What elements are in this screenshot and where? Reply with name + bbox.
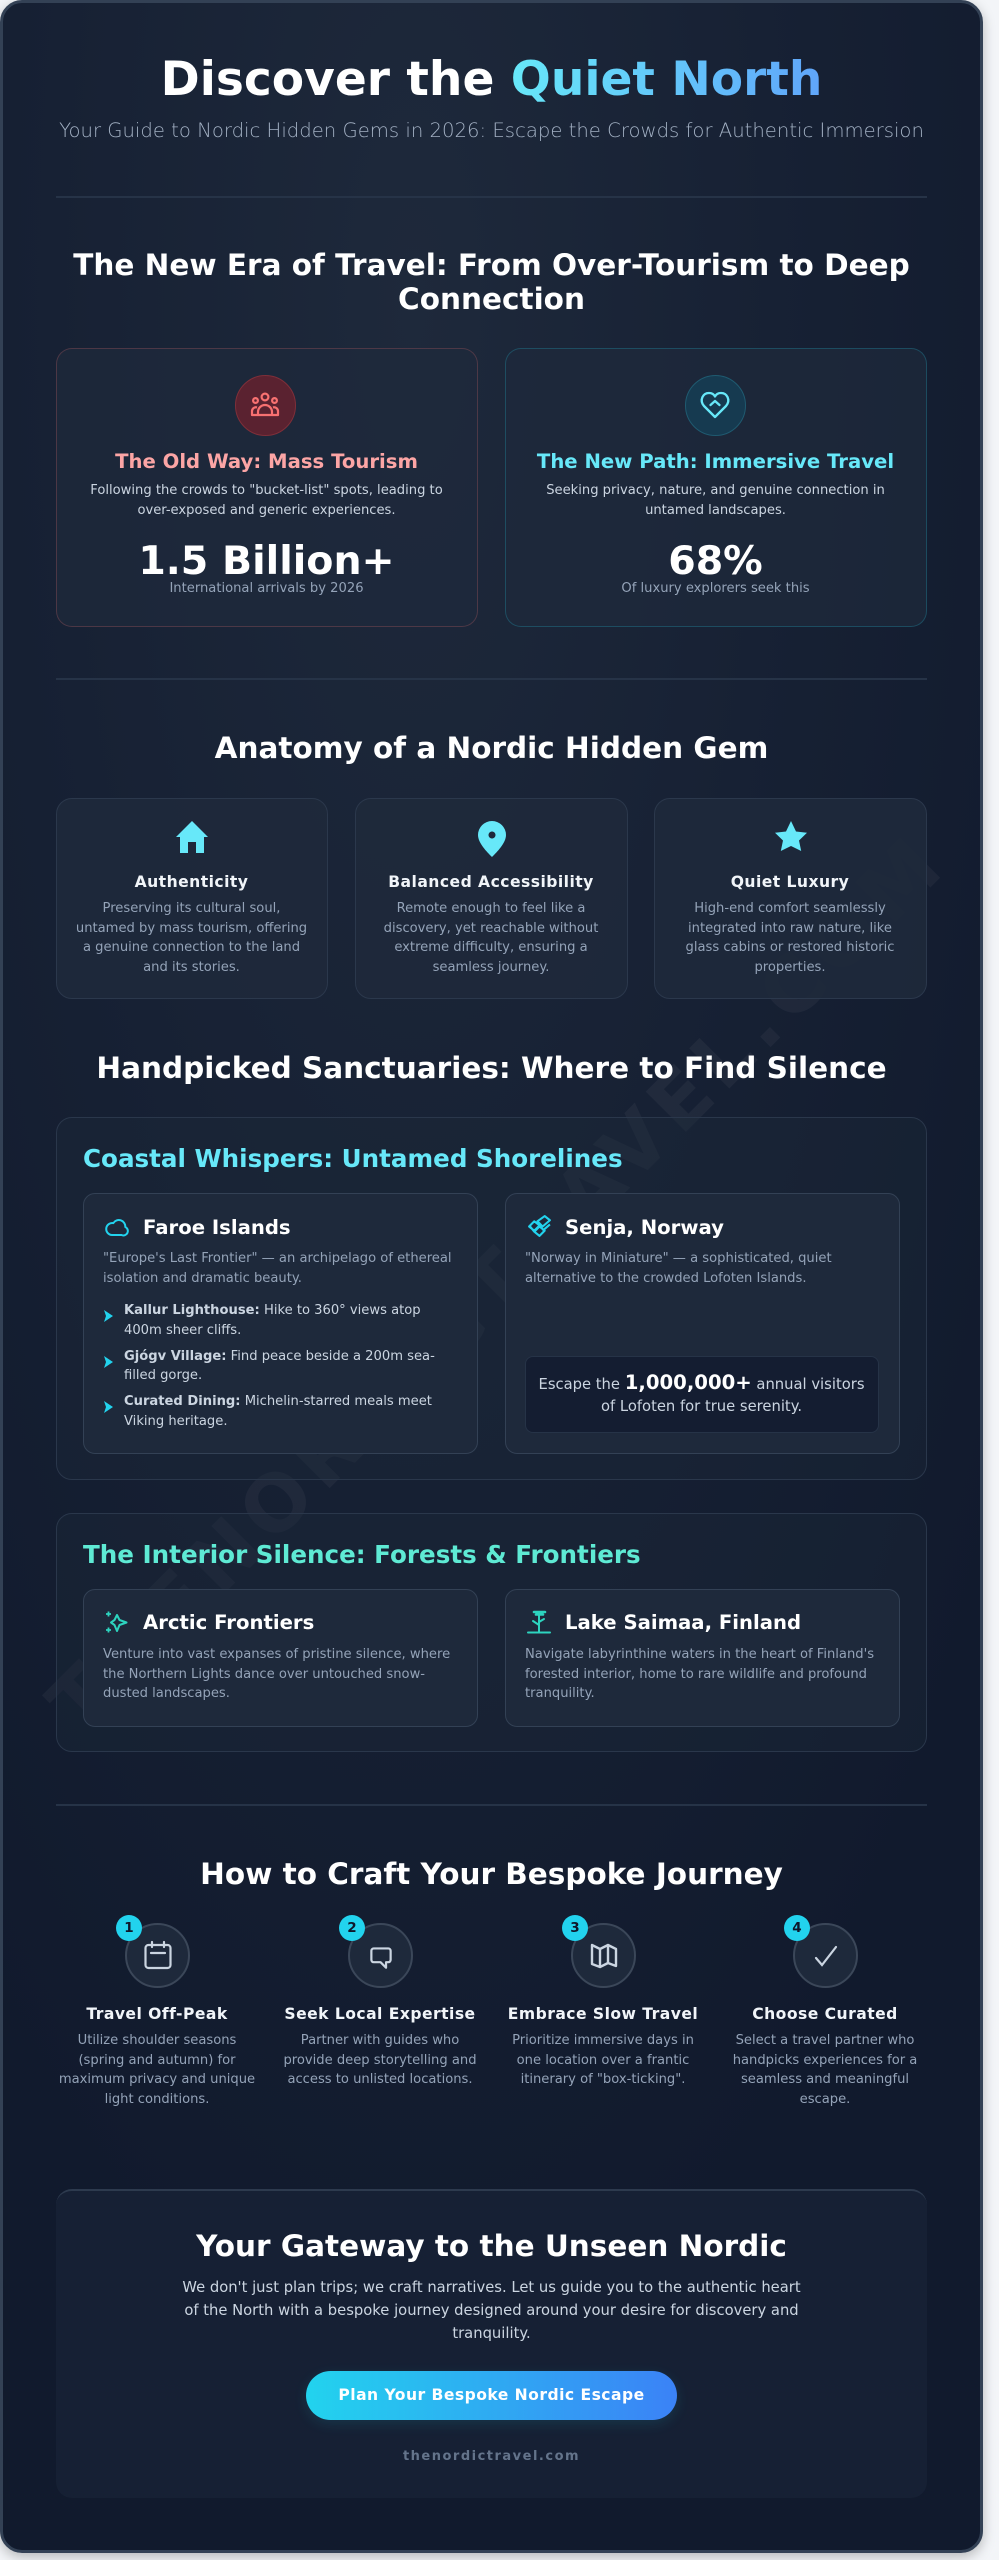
badge: 3 xyxy=(562,1915,588,1941)
stat label: International arrivals by 2026 xyxy=(169,581,364,596)
icon: heart xyxy=(685,375,746,436)
heading: balanced accessibility: Balanced Accessibility xyxy=(388,873,594,891)
text: senja description: "Norway in Miniature" — a sophisticated, quiet xyxy=(525,1251,832,1266)
text: senja description xyxy=(525,1251,832,1286)
heading: anatomy: Anatomy of a Nordic Hidden Gem xyxy=(215,731,768,765)
text: old way description: Following the crowds to "bucket-list" spots, leading to xyxy=(90,483,443,498)
text: step 2: provide deep storytelling and xyxy=(283,2053,477,2068)
badge: 4: 4 xyxy=(792,1920,802,1936)
heading: new path: The New Path: Immersive Travel xyxy=(537,450,894,473)
stat: 1.5 billion: 1.5 Billion+ xyxy=(138,538,395,584)
text: gateway: of the North with a bespoke journey designed around your desire for discovery and xyxy=(184,2302,799,2319)
heading: interior: The Interior Silence: Forests & Frontiers xyxy=(83,1540,641,1569)
badge: 3: 3 xyxy=(570,1920,580,1936)
button xyxy=(306,2371,677,2420)
text: step 3: Prioritize immersive days in xyxy=(512,2033,694,2048)
text: step 3 xyxy=(512,2033,694,2087)
text: step 4 xyxy=(733,2033,917,2107)
heading: faroe islands: Faroe Islands xyxy=(143,1216,291,1239)
text: step 2: access to unlisted locations. xyxy=(287,2072,473,2087)
icon: tree by lake xyxy=(527,1610,551,1634)
text: faroe description: "Europe's Last Frontier" — an archipelago of ethereal xyxy=(103,1251,452,1266)
panel: the old way xyxy=(56,348,478,627)
heading: new era of travel xyxy=(73,248,910,316)
text: step 4: escape. xyxy=(800,2092,850,2107)
text: balanced accessibility: Remote enough to feel like a xyxy=(397,901,585,916)
icon: waves xyxy=(528,1215,551,1237)
text: arctic: dusted landscapes. xyxy=(103,1686,230,1701)
panel: interior silence xyxy=(56,1513,927,1752)
text: balanced accessibility xyxy=(384,901,598,975)
icon: crowd xyxy=(235,375,296,436)
badge: 2: 2 xyxy=(347,1920,357,1936)
text: authenticity xyxy=(76,901,307,975)
heading: gateway: Your Gateway to the Unseen Nordic xyxy=(196,2229,787,2263)
text: step 1: light conditions. xyxy=(105,2092,209,2107)
heading: step 1: Travel Off-Peak xyxy=(86,2005,228,2023)
icon: cloud xyxy=(105,1219,129,1236)
watermark: THENORDICTRAVEL.COM xyxy=(32,817,964,1749)
list item: curated dining: Curated Dining: Michelin-starred meals meet xyxy=(124,1394,432,1409)
list item: kallur lighthouse: Kallur Lighthouse: Hike to 360° views atop xyxy=(124,1303,421,1318)
text: step 1: (spring and autumn) for xyxy=(78,2053,236,2068)
list item: curated dining xyxy=(104,1394,432,1429)
heading: coastal: Coastal Whispers: Untamed Shorelines xyxy=(83,1144,623,1173)
text: old way description: over-exposed and generic experiences. xyxy=(137,503,396,518)
icon: check xyxy=(793,1923,858,1988)
website address: thenordictravel.com xyxy=(403,2449,580,2464)
heading: step 4: Choose Curated xyxy=(752,2005,898,2023)
heading: step 2: Seek Local Expertise xyxy=(284,2005,476,2023)
step 3 xyxy=(508,1915,698,2087)
stat: 68%: 68% xyxy=(668,538,763,584)
text: balanced accessibility: extreme difficulty, ensuring a xyxy=(394,940,588,955)
text: step 2: Partner with guides who xyxy=(301,2033,459,2048)
text: balanced accessibility: discovery, yet reachable without xyxy=(384,921,598,936)
icon: speech bubble xyxy=(348,1923,413,1988)
badge: 1 xyxy=(116,1915,142,1941)
icon: star xyxy=(775,821,807,851)
text: gateway: tranquility. xyxy=(452,2325,531,2342)
list item: gjogv village xyxy=(104,1349,435,1383)
text: senja description: alternative to the crowded Lofoten Islands. xyxy=(525,1271,806,1286)
text: step 3: itinerary of "box-ticking". xyxy=(521,2072,685,2087)
subtitle: Your Guide to Nordic Hidden Gems in 2026: Escape the Crowds for Authentic Immersion xyxy=(59,119,924,142)
text: faroe description xyxy=(103,1251,452,1286)
text: arctic: the Northern Lights dance over untouched snow- xyxy=(103,1667,425,1682)
text: quiet luxury xyxy=(686,901,894,975)
text: step 3: one location over a frantic xyxy=(517,2053,689,2068)
icon: calendar xyxy=(125,1923,190,1988)
icon: sparkles xyxy=(106,1612,128,1632)
text: gateway xyxy=(182,2279,801,2342)
text: gateway: We don't just plan trips; we craft narratives. Let us guide you to the authentic heart xyxy=(182,2279,801,2296)
heading: authenticity: Authenticity xyxy=(135,873,248,891)
text: faroe description: isolation and dramatic beauty. xyxy=(103,1271,302,1286)
panel: balanced accessibility xyxy=(355,798,628,999)
card: arctic frontiers xyxy=(83,1589,478,1727)
text: step 1: Utilize shoulder seasons xyxy=(78,2033,236,2048)
panel: call to action xyxy=(56,2189,927,2498)
step 2 xyxy=(283,1915,477,2087)
text: lake saimaa: tranquility. xyxy=(525,1686,595,1701)
list item: kallur lighthouse: 400m sheer cliffs. xyxy=(124,1323,241,1338)
icon: map xyxy=(571,1923,636,1988)
text: quiet luxury: High-end comfort seamlessly xyxy=(694,901,886,916)
list item: gjogv village: Gjógv Village: Find peace beside a 200m sea- xyxy=(124,1349,435,1364)
text: lake saimaa xyxy=(525,1647,874,1701)
text: new path description: untamed landscapes. xyxy=(645,503,786,518)
text: lake saimaa: Navigate labyrinthine waters in the heart of Finland's xyxy=(525,1647,874,1662)
panel: authenticity xyxy=(56,798,328,999)
panel: the new path xyxy=(505,348,927,627)
heading: quiet luxury: Quiet Luxury xyxy=(731,873,849,891)
text: step 4: handpicks experiences for a xyxy=(733,2053,917,2068)
text: authenticity: untamed by mass tourism, offering xyxy=(76,921,307,936)
list item: kallur lighthouse xyxy=(104,1303,421,1338)
badge: 4 xyxy=(784,1915,810,1941)
list: faroe highlights xyxy=(104,1303,435,1429)
step 4 xyxy=(733,1915,917,2107)
list item: curated dining: Viking heritage. xyxy=(124,1414,228,1429)
heading: bespoke journey: How to Craft Your Bespoke Journey xyxy=(200,1857,783,1891)
icon: map pin xyxy=(478,821,506,857)
badge: 2 xyxy=(339,1915,365,1941)
callout: lofoten visitors: of Lofoten for true serenity. xyxy=(601,1398,802,1415)
text: new path description: Seeking privacy, nature, and genuine connection in xyxy=(546,483,885,498)
text: step 2 xyxy=(283,2033,477,2087)
text: authenticity: and its stories. xyxy=(143,960,240,975)
card: faroe islands xyxy=(83,1193,478,1454)
step 1 xyxy=(59,1915,255,2107)
button: Plan Your Bespoke Nordic Escape xyxy=(338,2386,645,2404)
panel: coastal whispers xyxy=(56,1117,927,1480)
text: old way description xyxy=(90,483,443,518)
callout: lofoten visitors: Escape the 1,000,000+ annual visitors xyxy=(538,1371,864,1394)
heading: arctic: Arctic Frontiers xyxy=(143,1611,314,1634)
card: senja norway xyxy=(505,1193,900,1454)
heading: new era of travel: Connection xyxy=(398,282,585,316)
title: Discover the Quiet North xyxy=(161,52,822,107)
stat label: Of luxury explorers seek this xyxy=(621,581,810,596)
heading: lake saimaa: Lake Saimaa, Finland xyxy=(565,1611,801,1634)
text: quiet luxury: glass cabins or restored historic xyxy=(686,940,894,955)
text: lake saimaa: forested interior, home to rare wildlife and profound xyxy=(525,1667,867,1682)
heading: sanctuaries: Handpicked Sanctuaries: Where to Find Silence xyxy=(96,1051,887,1085)
heading: new era of travel: The New Era of Travel: From Over-Tourism to Deep xyxy=(73,248,910,282)
icon: house xyxy=(176,821,208,853)
text: step 1 xyxy=(59,2033,255,2107)
heading: senja: Senja, Norway xyxy=(565,1216,724,1239)
text: step 4: Select a travel partner who xyxy=(736,2033,914,2048)
card: lake saimaa xyxy=(505,1589,900,1727)
callout: lofoten visitors xyxy=(525,1356,879,1433)
text: step 1: maximum privacy and unique xyxy=(59,2072,255,2087)
heading: old way: The Old Way: Mass Tourism xyxy=(115,450,418,473)
panel: quiet luxury xyxy=(654,798,927,999)
text: balanced accessibility: seamless journey. xyxy=(433,960,549,975)
text: authenticity: Preserving its cultural soul, xyxy=(103,901,280,916)
text: arctic: Venture into vast expanses of pristine silence, where xyxy=(103,1647,450,1662)
text: arctic xyxy=(103,1647,450,1701)
list item: gjogv village: filled gorge. xyxy=(124,1368,202,1383)
heading: step 3: Embrace Slow Travel xyxy=(508,2005,698,2023)
text: quiet luxury: integrated into raw nature, like xyxy=(688,921,892,936)
text: quiet luxury: properties. xyxy=(754,960,826,975)
text: step 4: seamless and meaningful xyxy=(741,2072,909,2087)
badge: 1: 1 xyxy=(124,1920,134,1936)
text: new path description xyxy=(546,483,885,518)
text: authenticity: a genuine connection to the land xyxy=(83,940,300,955)
